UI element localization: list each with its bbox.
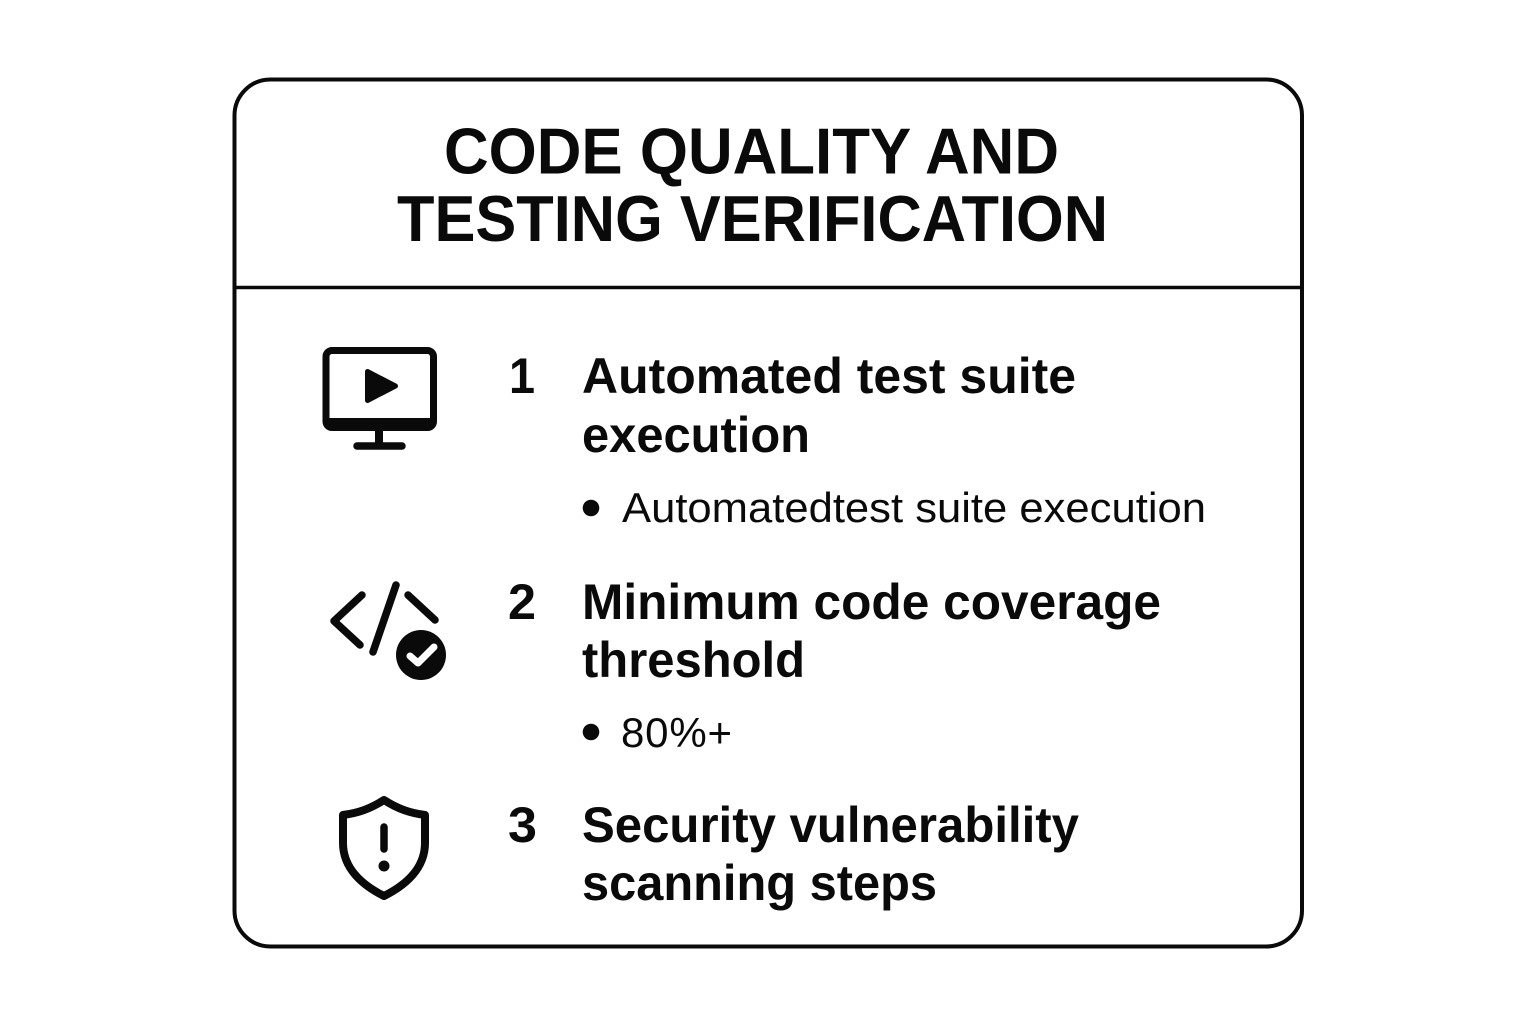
icon: shield with exclamation mark: [343, 800, 425, 896]
step 2 heading: [582, 574, 1161, 688]
step 2 heading: Minimum code coverage: [582, 574, 1161, 630]
icon: monitor with play button: [326, 350, 434, 446]
step 3 heading: Security vulnerability: [582, 797, 1079, 853]
step 1 heading: [582, 348, 1076, 463]
step 3 heading: scanning steps: [582, 855, 937, 911]
step 2 heading: threshold: [582, 632, 805, 688]
step 1 heading: Automated test suite: [582, 348, 1076, 404]
step 2 bullet: 80%+: [621, 709, 732, 756]
title: [397, 114, 1108, 255]
step 3 heading: [582, 797, 1079, 911]
step 1 heading: execution: [582, 407, 810, 463]
title: TESTING VERIFICATION: [397, 182, 1108, 255]
step 1 bullet: Automatedtest suite execution: [622, 484, 1206, 531]
step 3 number: 3: [508, 797, 537, 853]
panel: card: [234, 80, 1302, 946]
title: CODE QUALITY AND: [444, 114, 1059, 188]
icon: code tag with check badge: [334, 585, 446, 680]
step 2 number: 2: [508, 574, 536, 630]
step 1 number: 1: [509, 348, 535, 404]
